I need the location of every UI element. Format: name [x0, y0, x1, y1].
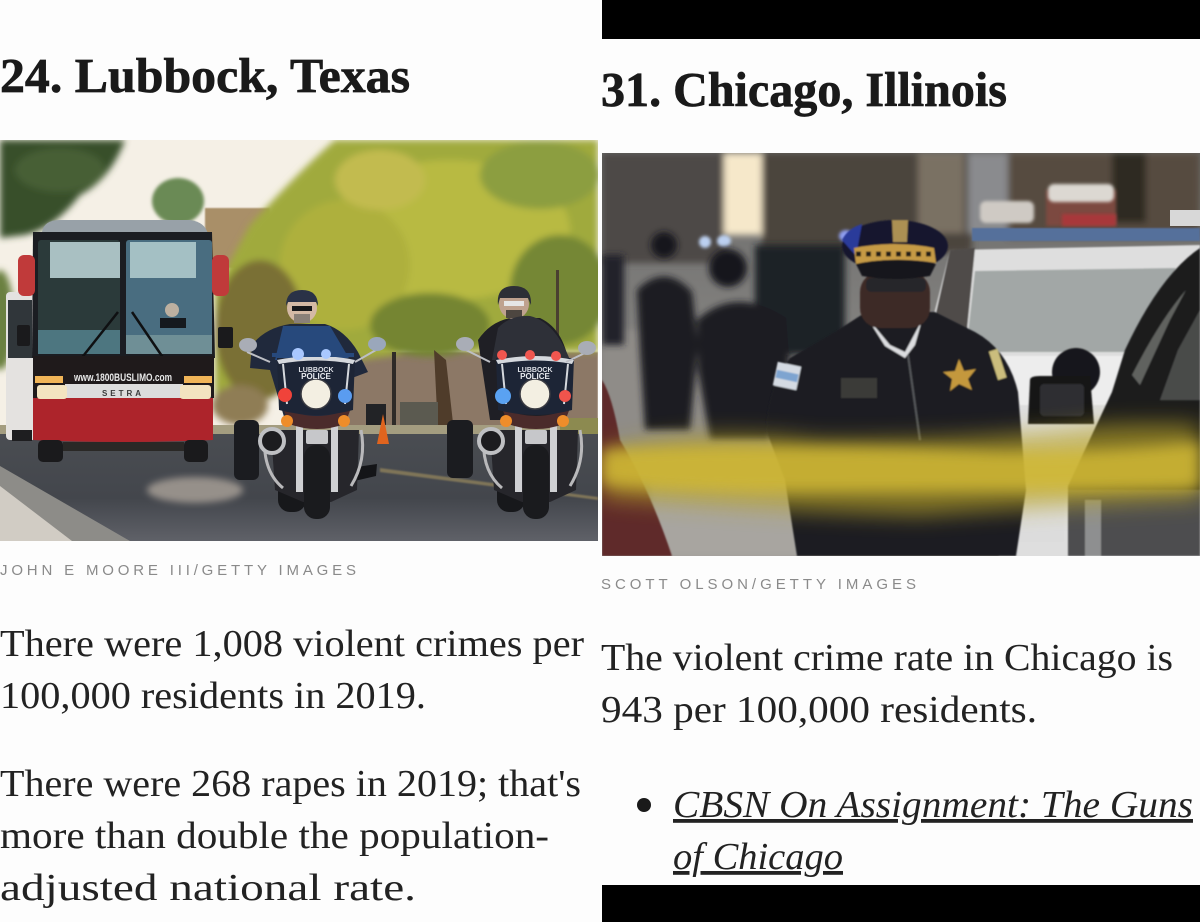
text block: violent crime rate [0, 623, 584, 717]
crime scene tape [602, 424, 1200, 516]
black bar bottom [602, 885, 1200, 922]
motorcycle right [447, 286, 596, 519]
text block: Chicago crime rate [601, 637, 1173, 731]
text block: Chicago crime rate: 943 per 100,000 residents. [601, 689, 1037, 731]
dark car at right [1018, 248, 1200, 556]
bus: SETRA [102, 389, 144, 398]
tree trunk [434, 350, 453, 425]
bench and bin [366, 404, 386, 427]
photo: Lubbock police motorcycles escorting a bus [0, 140, 610, 541]
text block: rapes: adjusted national rate. [0, 867, 416, 909]
white police car [930, 228, 1200, 560]
bus website text: www.1800BUSLIMO.com [73, 372, 172, 384]
text block: rapes: There were 268 rapes in 2019; that's [0, 763, 581, 805]
ground [0, 425, 560, 434]
icon: bullet [637, 798, 651, 812]
photo credit: Lubbock: JOHN E MOORE III/GETTY IMAGES [0, 562, 356, 579]
bulleted link: of Chicago [673, 836, 843, 878]
bulleted link [637, 784, 1193, 878]
heading: Chicago: 31. Chicago, Illinois [601, 62, 1007, 117]
wall behind [348, 351, 598, 425]
text block: Chicago crime rate: The violent crime rate in Chicago is [601, 637, 1173, 679]
officer [766, 220, 1026, 556]
text block: rapes [0, 763, 581, 909]
traffic cone [377, 414, 389, 444]
panel: Lubbock [0, 48, 610, 909]
bus [6, 220, 233, 462]
text block: rapes: more than double the population- [0, 815, 549, 857]
text block: violent crime rate: 100,000 residents in 2019. [0, 675, 426, 717]
black bar top [602, 0, 1200, 39]
blurred police officers [602, 232, 845, 440]
photo: Chicago police officer behind crime scene tape [602, 153, 1200, 560]
photo credit: Chicago: SCOTT OLSON/GETTY IMAGES [601, 576, 916, 593]
heading: Lubbock: 24. Lubbock, Texas [0, 48, 410, 103]
panel: Chicago [601, 0, 1200, 922]
bulleted link: CBSN On Assignment: The Guns [673, 784, 1193, 826]
text block: violent crime rate: There were 1,008 violent crimes per [0, 623, 584, 665]
motorcycle left [234, 290, 386, 519]
small tree and building [205, 208, 270, 268]
red-jacket bystander [602, 380, 672, 556]
